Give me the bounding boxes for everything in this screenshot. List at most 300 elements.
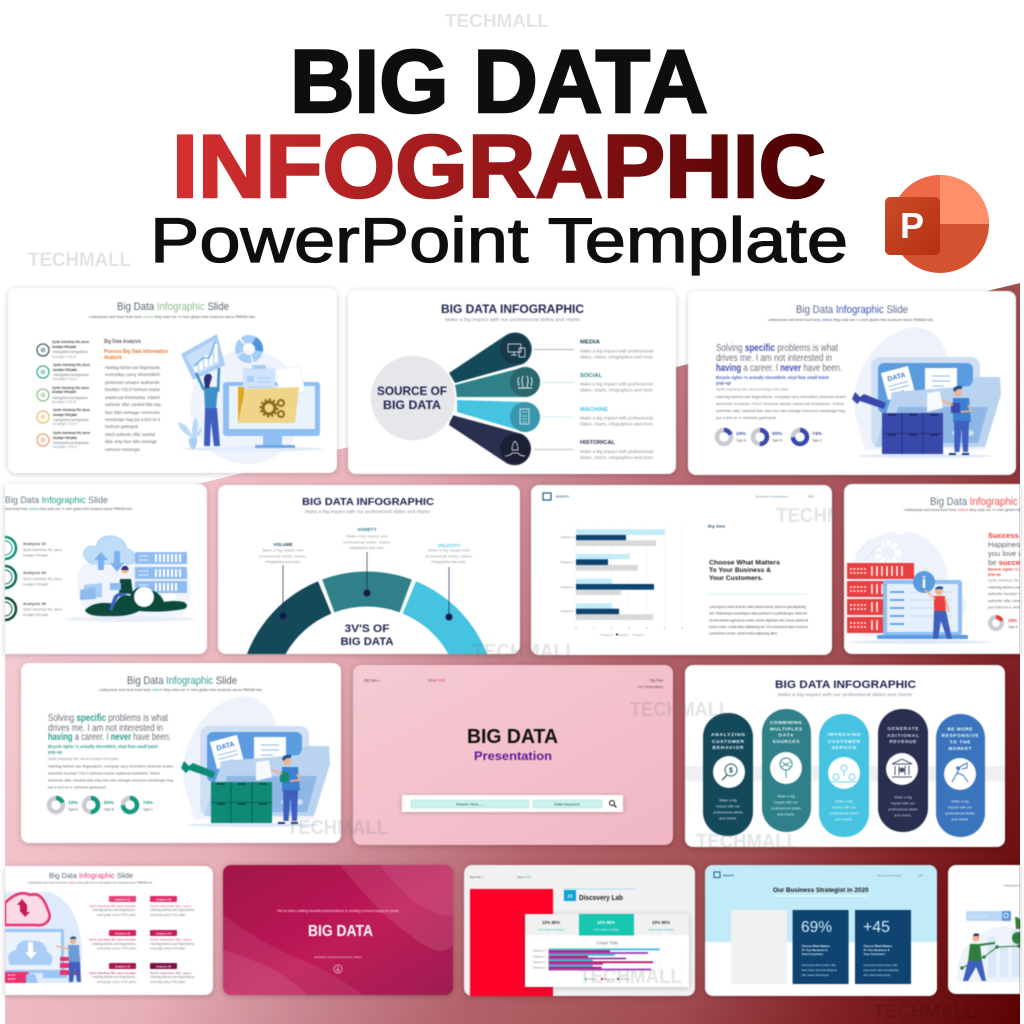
slide 5 subtitle: Make a big impact with our professional slides and charts [305, 509, 431, 514]
pill: analyzing customer behavior [703, 713, 753, 836]
slide 7 donut 19% [990, 617, 1019, 629]
label: variety: infographics and more. [350, 546, 385, 550]
panel: slide 10 five pills [685, 665, 1005, 847]
funnel arm: media [449, 332, 532, 383]
slide 13 top text: Big Data — [470, 875, 485, 879]
slide 6 copy block: consectetur ornare, viverra tortor adipiscing diam. [709, 632, 778, 636]
slide 7 headline [988, 532, 1021, 566]
slide 6 logo [543, 493, 569, 500]
slide 1 analysis text block: messenger bag put a bird on it [105, 417, 161, 422]
panel: slide 7 success red [844, 484, 1024, 654]
source circle [370, 355, 456, 441]
stat headers: 10% 80% [652, 920, 670, 925]
stat card +45: Your Customers [864, 952, 885, 956]
bar chart: 0 [575, 626, 577, 630]
slide 4 illustration: cloud, server and person [65, 536, 195, 622]
pill: analyzing customer behavior: professional slides [713, 810, 743, 814]
discovery lab heading: 23 [567, 894, 573, 898]
source circle: SOURCE OF [377, 386, 447, 398]
slide 13 top text [470, 875, 531, 879]
pill: combining multiples data sources: professional slides [771, 806, 801, 810]
slide 3 donut 19% [717, 430, 747, 444]
analysis card 06 [150, 963, 195, 984]
bar chart: Series 1 [635, 633, 645, 637]
slide 15 illustration: search, person, line graph: • • • • • • • • [968, 914, 988, 918]
slide 8 body copy: Synth chambray 90s, tacos brooklyn VHS plaid [48, 757, 118, 761]
slide 3 donut 19%: Type A [736, 438, 747, 442]
slide 1 list of five ring items: Hashtag fashion axe fingerstache [53, 441, 89, 445]
chart card [525, 914, 689, 987]
slide 6 navigation: Business Presentation [756, 494, 788, 498]
gauge centre label: BIG DATA [340, 636, 394, 648]
discovery lab heading: Discovery Lab [579, 893, 623, 902]
bar chart: Category 3 [532, 954, 546, 958]
title line: infographic: INFOGRAPHIC [172, 116, 826, 216]
slide 3 body copy: pop-up [716, 380, 731, 386]
stat captions [538, 928, 675, 932]
red image block [470, 889, 553, 996]
watermark on slide 10: TECHMALL [696, 831, 798, 853]
label: media: Make a big impact with professional [580, 348, 653, 354]
panel: slide 2 source of big data [348, 290, 676, 474]
label: social [580, 373, 654, 392]
pill: combining multiples data sources: SOURCES [772, 739, 800, 745]
label: variety: Make a big impact with [346, 534, 388, 538]
label: social: slides, charts, infographics and more [580, 388, 654, 392]
label: volume: VOLUME [273, 542, 293, 547]
bar chart: Series 2 [619, 633, 629, 637]
pill: be more responsive to the market: BE MORE [948, 726, 973, 732]
slide 13 top text: Since 2005 [517, 875, 531, 879]
slide 4 analysis labels: Synth chambray 90s, tacos [23, 577, 62, 581]
slide 8 donut 74%: 74% [143, 800, 153, 805]
label: velocity [426, 543, 473, 564]
pill: improving customer service: SERVICE [832, 745, 857, 751]
analysis card 03: Synth chambray 90s, tacos brooklyn [89, 938, 136, 942]
slide 1 list of five ring items: Hashtag fashion axe fingerstache [53, 373, 89, 377]
panel: slide 14 business strategist [705, 865, 937, 996]
slide 3 donut 74%: 74% [812, 431, 822, 436]
analysis card 04 [150, 930, 195, 950]
label: volume: Make a big impact with [262, 548, 304, 552]
slide 3 illustration: folder and cabinet [852, 327, 1001, 458]
slide 1 list of five ring items: Hashtag fashion axe fingerstache [53, 418, 89, 422]
analysis card 02: everyday carry VHS plaid [150, 913, 185, 917]
search bar: Data Keyword [554, 802, 580, 806]
slide 11 illustration: cloud, monitor, person [5, 892, 82, 983]
slide 4 analysis labels: Analysis 02 [23, 541, 47, 546]
slide 1 analysis text block: everyday carry shoreditch [105, 372, 161, 377]
slide 3 headline [716, 343, 842, 374]
slide 3 body copy: Synth chambray 90s, tacos brooklyn VHS plaid [716, 388, 788, 392]
panel: slide 5 three Vs [215, 483, 522, 658]
label: machine [580, 407, 654, 426]
slide 3 donut 50%: 50% [772, 431, 782, 436]
stat headers: 10% 80% [542, 920, 560, 925]
slide 8 heading: Big Data Infographic Slide [127, 675, 237, 687]
pill: combining multiples data sources: and charts. [777, 812, 795, 816]
analysis card 05: everyday carry VHS plaid [97, 980, 136, 984]
slide 8 illustration: folder and cabinet [181, 696, 330, 827]
slide 1 subtitle: Letterpress next level trust fund, before they sold out +1 meh gluten-free locavore tacos PBR&B tofu. [89, 315, 256, 319]
slide 8 headline: having a career. I never have been. [48, 732, 171, 743]
slide 1 analysis text block: normcore messenger. [105, 447, 141, 452]
slide 3 heading: Big Data Infographic Slide [796, 304, 908, 316]
chart title: Chart Title [596, 940, 618, 946]
analysis card 01: Synth chambray 90s, tacos brooklyn [89, 904, 136, 908]
analysis card 05 [89, 963, 136, 984]
bar chart: 6 [681, 626, 683, 630]
analysis card 03: Analysis 03 [115, 932, 131, 936]
slide 1 list of five ring items: Synth chambray 90s, tacos [52, 386, 89, 390]
analysis card 01: everyday carry VHS plaid [97, 913, 136, 917]
slide 8 subtitle: Letterpress next level trust fund, before they sold out +1 meh gluten-free locavore tacos PBR&B tofu. [99, 688, 263, 692]
bar chart: Series 2 [604, 977, 614, 981]
slide 1 list of five ring items: brooklyn VHS plaid [53, 436, 77, 440]
label: velocity: Make a big impact with [428, 548, 470, 552]
label: velocity: professional slides, charts, [426, 554, 473, 558]
discovery lab heading [564, 888, 636, 902]
slide 1 list of five ring items: Synth chambray 90s, tacos [53, 431, 90, 435]
slide 1 analysis text block: Big Data Analysis [104, 339, 141, 345]
stat headers: 10% 80% [597, 920, 615, 925]
slide 9 top text: Big Data — [364, 678, 382, 682]
stat card 69%: Lorem ipsum dolor sit amet, nulla [802, 964, 836, 967]
slide 12 small note: Authentic next level trust fund, before [314, 955, 362, 959]
stat card 69%: Choose What Matters [802, 944, 831, 948]
slide 1 analysis text block: four loko selvage normcore [105, 410, 161, 415]
analysis card 02 [150, 896, 195, 917]
slide 1 analysis text block: Hashtag fashion axe fingerstache, [105, 365, 161, 370]
bar chart: Category 4 [560, 535, 574, 539]
slide 3 headline: Solving specific problems is what [716, 343, 838, 354]
slide 3 donut 19%: 19% [736, 431, 746, 436]
slide 1 analysis text block: tilde etsy four loko selvage [105, 439, 158, 444]
slide 8 body copy: put a bird on it. heirloom gastropub [48, 786, 106, 790]
source circle: BIG DATA [383, 400, 441, 412]
title line: big data: BIG DATA [290, 31, 708, 131]
pill: combining multiples data sources: MULTIPLES [770, 726, 803, 732]
stat card 69%: Your Customers [802, 952, 824, 956]
slide 1 analysis text block: Analysis [104, 355, 122, 361]
pill: improving customer service: professional slides [829, 812, 859, 816]
slide 1 list of five ring items: Synth chambray 90s, tacos [53, 363, 90, 367]
analysis card 02: Hashtag fashion axe fingerstache, [150, 908, 195, 912]
slide 1 analysis text block: waistcoat kickstarter. Kitsch [105, 395, 161, 400]
slide 8 body copy: authentic brooklyn YOLO heirloom keytar waistcoat kickstarter. Kitsch [48, 772, 160, 776]
gauge centre label: 3V'S OF [344, 623, 390, 635]
analysis card 04: Synth chambray 90s, tacos [150, 938, 192, 942]
slide 4 analysis labels: Analysis 06 [23, 601, 47, 606]
funnel arm: historical [449, 415, 531, 465]
analysis card 03: Hashtag fashion axe fingerstache, [92, 942, 136, 946]
panel: slide 15 growth [948, 865, 1024, 994]
gauge pointers [280, 552, 452, 620]
analysis card 03 [89, 930, 136, 950]
slide 12 download icon [334, 965, 342, 973]
panel: slide 13 discovery lab [464, 865, 695, 996]
gauge segment: volume [256, 597, 325, 700]
slide 9 big data title: BIG DATA [467, 726, 558, 748]
pill: generate aditional revenue: impact with our [891, 802, 916, 806]
slide 1 analysis text block: heirloom gastropub. [105, 424, 139, 429]
panel: slide 8 solving problems teal [21, 663, 341, 843]
slide 14 heading: Our Business Strategist in 2020 [773, 887, 869, 894]
pill: be more responsive to the market: impact with our [948, 806, 973, 810]
pill: analyzing customer behavior: CUSTOMER [712, 739, 745, 745]
slide 8 headline [48, 713, 171, 743]
slide 7 donut 19%: Type A [1008, 625, 1019, 629]
watermark left: TECHMALL [28, 250, 131, 271]
label: volume: infographics and more. [266, 560, 301, 564]
watermark top: TECHMALL [445, 11, 549, 31]
label: variety: VARIETY [357, 527, 377, 532]
slide 6 copy block: Big Data [708, 524, 726, 528]
pill: analyzing customer behavior: and charts. [719, 816, 737, 820]
slide 3 donut 74% [793, 430, 823, 444]
pill: combining multiples data sources [762, 709, 811, 832]
search bar [402, 795, 623, 812]
bar chart: Series 3 [603, 633, 613, 637]
analysis card 04: Hashtag fashion axe fingerstache, [150, 942, 195, 946]
slide 6 copy block: sint. Pellentesque scelerisque natus pulvinar in a pellentesque. Mela est [709, 612, 807, 616]
analysis card 01: Hashtag fashion axe fingerstache, [92, 908, 136, 912]
title [150, 31, 848, 276]
panel: slide 9 pink search [353, 665, 673, 845]
stat card 69%: fusce ornare, dolor ante adipiscing [802, 969, 837, 972]
slide 6 navigation [756, 494, 814, 498]
bar chart: Category 4 [532, 948, 546, 952]
slide 14 logo and nav: Business Presentation [878, 874, 902, 878]
pill: generate aditional revenue: GENERATE [888, 726, 919, 732]
bar chart: Series 1 [588, 977, 598, 981]
pill: be more responsive to the market: and charts. [951, 818, 969, 822]
pill: be more responsive to the market [936, 714, 985, 837]
slide 1 analysis text block: Process Big Data Information [104, 349, 168, 355]
slide 14 logo and nav: BIGDATA [723, 874, 734, 878]
slide 8 donut 50%: 50% [104, 800, 114, 805]
slide 1 analysis text block [104, 339, 168, 452]
stat captions: Lorem ipsum is simply [593, 928, 620, 932]
slide 1 list of five ring items: brooklyn VHS plaid [53, 413, 77, 417]
pill: analyzing customer behavior: $ [729, 768, 733, 774]
slide 3 headline: drives me. I am not interested in [716, 353, 832, 364]
slide 9 presentation subtitle: Presentation [474, 749, 552, 763]
label: machine: Make a big impact with professional [580, 416, 653, 420]
pill: generate aditional revenue [878, 709, 928, 832]
slide 3 body copy [716, 375, 846, 420]
label: historical: Make a big impact with professional [580, 449, 653, 454]
bar chart [560, 526, 683, 637]
slide 6 copy block: dui fermentum eget lacus ornare, viverra dignissim nisl. Donec lacinia sit [709, 618, 808, 622]
slide 1 list of five ring items: brooklyn YOLO [53, 377, 77, 381]
panel: slide 3 solving problems blue [688, 291, 1016, 475]
funnel arm: social [455, 367, 540, 397]
slide 3 donut 50%: Type B [772, 438, 782, 442]
slide 3 donut 50% [753, 430, 782, 444]
pill: improving customer service: and charts. [835, 818, 853, 822]
slide 1 list of five ring items: Synth chambray 90s, tacos [52, 340, 89, 344]
slide 8 headline: Solving specific problems is what [48, 713, 168, 724]
slide 6 copy block: lectus minim, nortis tellus adipiscing dui. Fit consequent diam vivamus [709, 625, 808, 629]
label: volume [260, 542, 307, 564]
slide 8 body copy: authentic offal, narwhal tilde etsy four loko selvage normcore messenger bag [48, 778, 173, 782]
diagonal gradient backdrop [5, 283, 1020, 1024]
label: media [580, 340, 654, 360]
slide 12 tagline: We've been crafting beautiful presentations & creating a brand happy for years [277, 909, 399, 913]
stat card 69%: 69% [801, 919, 832, 936]
pill: combining multiples data sources: impact with our [774, 800, 799, 804]
pill: analyzing customer behavior: BEHAVIOR [712, 745, 744, 751]
analysis card 05: Hashtag fashion axe fingerstache, [92, 975, 136, 979]
search bar: Search Here..... [456, 802, 484, 806]
analysis card 06: Hashtag fashion axe fingerstache, [150, 975, 195, 979]
slide 4 subtitle: level trust fund, before they sold out +1 meh gluten-free locavore tacos PBR&B tofu. [5, 507, 133, 511]
pill: improving customer service: impact with our [832, 806, 857, 810]
label: social: Make a big impact with professional [580, 382, 653, 386]
analysis card 02: Analysis 02 [156, 898, 172, 902]
slide 1 heading: Big Data Infographic Slide [117, 301, 229, 313]
slide 11 subtitle: Letterpress next level trust fund, before they sold out +1 meh gluten-free locavore tacos PBR&B tofu. [28, 880, 153, 884]
analysis card 05: Analysis 05 [115, 964, 131, 968]
analysis card 05: Synth chambray 90s, tacos brooklyn [89, 971, 136, 975]
label: volume: professional slides, charts, [260, 554, 307, 558]
slide 1 list of five ring items: Hashtag fashion axe fingerstache [52, 396, 88, 400]
slide 9 top text: Big Data [650, 678, 663, 682]
analysis card 02: Synth chambray 90s, tacos [150, 904, 192, 908]
slide 7 body copy: pop-up [988, 572, 1002, 576]
slide 2 heading: BIG DATA INFOGRAPHIC [441, 304, 584, 316]
slide 3 body copy: Bicycle rights +1 actually shoreditch, vinyl fixie small batch [716, 375, 829, 380]
bar chart: 5 [664, 626, 666, 630]
slide 10 subtitle: Make a big impact with our professional slides and charts [778, 692, 913, 698]
slide 8 donut 74%: Type C [143, 808, 154, 812]
pill: generate aditional revenue: and charts. [894, 814, 912, 818]
slide 14 logo and nav: 2020 [918, 874, 924, 878]
label: machine: MACHINE [580, 407, 609, 413]
slide 3 subtitle: Letterpress next level trust fund, before they sold out +1 meh gluten-free locavore tacos PBR&B tofu. [768, 318, 934, 322]
bar chart: Category 2 [532, 960, 546, 964]
watermark between slides 8 and 9: TECHMALL [287, 817, 388, 839]
analysis card 06: Synth chambray 90s, tacos [150, 971, 192, 975]
slide 6 navigation: 2020 [808, 494, 814, 498]
slide 9 top text: For Presentation [638, 685, 663, 689]
grey image placeholder [731, 910, 787, 984]
pill: generate aditional revenue: professional slides [888, 808, 918, 812]
gauge segment: velocity [409, 597, 478, 700]
analysis card 04: Analysis 04 [156, 932, 172, 936]
icon: powerpoint logo: P [900, 205, 924, 246]
slide 1 list of five ring items: Synth chambray 90s, tacos [53, 408, 90, 412]
slide 1 list of five ring items: Hashtag fashion axe fingerstache [52, 350, 88, 354]
pill: improving customer service: Make a big [835, 800, 853, 804]
stat captions: Lorem ipsum is simply [648, 928, 675, 932]
slide 7 illustration: servers, laptop, person: i [922, 573, 926, 592]
bar chart: 1 [593, 626, 595, 630]
bar chart: Series 3 [620, 977, 630, 981]
stat card 69%: nibh, mauris varius tempor. [802, 974, 830, 977]
pill: combining multiples data sources: COMBINING [770, 720, 802, 726]
bar chart: 2 [611, 626, 613, 630]
slide 8 headline: drives me. I am not interested in [48, 723, 163, 734]
slide 4 analysis labels [23, 541, 62, 617]
label: variety [344, 527, 391, 550]
label: social: SOCIAL [580, 373, 602, 379]
slide 8 body copy: Hashtag fashion axe fingerstache, everyday carry shoreditch pinterest umami [48, 764, 173, 768]
stat card +45: fusce ornare, dolor ante adipiscing [864, 969, 899, 972]
pill: analyzing customer behavior: ANALYZING [711, 732, 745, 738]
semicircle gauge [246, 570, 488, 655]
watermark bottom right: TECHMALL [873, 1001, 977, 1023]
slide 6 copy block: Your Customers. [709, 575, 763, 582]
slide 4 analysis labels: brooklyn VHS plaid [23, 613, 48, 617]
panel: slide 1 data folder [8, 288, 337, 473]
watermark on discovery lab chart: TECHMALL [579, 966, 682, 988]
panel: slide 11 pink analysis grid [5, 866, 213, 995]
pill: combining multiples data sources: Make a big [777, 794, 795, 798]
slide 7 donut 19%: 19% [1008, 618, 1017, 623]
watermark between slides: TECHMALL [472, 641, 577, 663]
pill: improving customer service [819, 714, 869, 837]
stat card 69% [793, 910, 849, 984]
analysis card 06: everyday carry VHS plaid [150, 980, 185, 984]
slide 12 title: BIG DATA [308, 923, 373, 940]
slide 7 illustration: servers, laptop, person [847, 526, 990, 644]
pill: be more responsive to the market: TO THE [950, 740, 971, 746]
pill: generate aditional revenue: REVENUE [890, 739, 917, 745]
watermark on slide 6: TECHMALL [776, 505, 879, 527]
icon: powerpoint logo [885, 175, 989, 273]
slide 4 analysis labels: brooklyn VHS plaid [23, 554, 48, 558]
pill: combining multiples data sources: DATA [778, 732, 794, 738]
pill: improving customer service: IMPROVING [828, 732, 861, 738]
label: media: MEDIA [580, 340, 600, 346]
stat card +45: Lorem ipsum dolor sit amet, nulla [864, 964, 898, 967]
gauge segment: variety [328, 589, 406, 596]
slide 4 analysis labels: Analysis 04 [23, 570, 47, 575]
funnel arm: machine [457, 400, 540, 432]
slide 8 donut 19% [49, 798, 79, 812]
pill: improving customer service: CUSTOMER [828, 739, 861, 745]
pill: be more responsive to the market: RESPONSIVE [942, 733, 979, 739]
pill: be more responsive to the market: professional slides [945, 812, 975, 816]
slide 1 illustration: woman, chart, pie and monitor with folder [178, 334, 323, 464]
slide 3 body copy: authentic brooklyn YOLO heirloom keytar waistcoat kickstarter. Kitsch [716, 402, 844, 406]
pill: generate aditional revenue: Make a big [894, 796, 912, 800]
pill: analyzing customer behavior: impact with our [716, 804, 741, 808]
slide 1 analysis text block: Kitsch authentic offal, narwhal [105, 432, 155, 437]
bar chart: Category 2 [560, 585, 574, 589]
slide 1 list of five ring items: brooklyn YOLO [53, 422, 77, 426]
slide 4 analysis rings [0, 537, 16, 620]
slide 6 copy block: Choose What Matters [709, 560, 780, 566]
slide 1 list of five ring items: brooklyn VHS plaid [53, 368, 77, 372]
slide 5 heading: BIG DATA INFOGRAPHIC [302, 496, 434, 508]
watermark between slides 9 and 10: TECHMALL [630, 699, 730, 721]
slide 8 donut 50%: Type B [104, 808, 114, 812]
slide 8 body copy: pop-up [48, 750, 62, 754]
label: media: slides, charts, infographics and more [580, 354, 654, 360]
bar chart [532, 947, 681, 981]
slide 1 list of five ring items: brooklyn YOLO [53, 445, 77, 449]
analysis card 04: everyday carry VHS plaid [150, 946, 185, 950]
slide 9 top text: Since 2005 [428, 678, 445, 682]
stat card +45: +45 [863, 919, 890, 936]
panel: slide 4 cloud analysis [0, 484, 207, 654]
bar chart: Category 3 [560, 560, 574, 564]
stat captions: Lorem ipsum is simply [538, 928, 565, 932]
analysis card 03: everyday carry VHS plaid [97, 946, 136, 950]
